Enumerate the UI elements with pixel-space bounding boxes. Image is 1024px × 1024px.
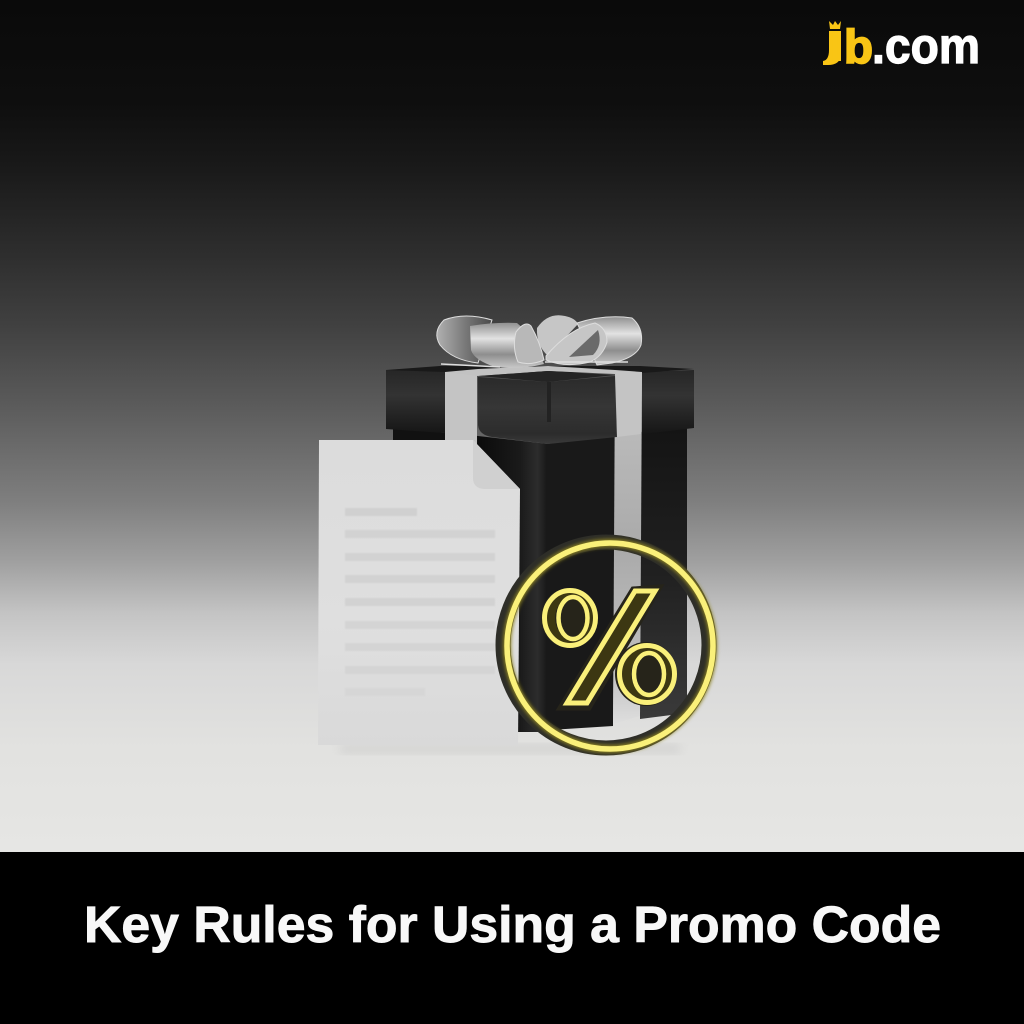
icon: crown — [829, 21, 841, 29]
logo: jb.com — [823, 21, 978, 65]
logo letter j: j — [823, 6, 846, 71]
document corner fold — [473, 440, 520, 489]
box body — [393, 426, 687, 732]
document sheet — [318, 440, 520, 745]
percent lower circle — [615, 642, 677, 706]
percent slash — [560, 587, 660, 708]
floor shadow — [340, 745, 680, 753]
box lid — [386, 366, 694, 444]
badge ring — [503, 542, 713, 749]
illustration: gift box with document and percent badge — [318, 315, 713, 753]
icon: document — [318, 440, 520, 745]
box ribbon: vertical — [445, 372, 642, 724]
logo letter j hook — [823, 50, 841, 65]
logo letter b: b — [844, 20, 873, 73]
logo wordmark: .com — [872, 18, 980, 74]
document text lines — [345, 508, 495, 696]
title: Key Rules for Using a Promo Code — [84, 896, 941, 953]
percent sign — [541, 587, 677, 708]
bow: silver ribbon — [437, 315, 642, 368]
icon: glowing percent badge — [503, 542, 713, 749]
title banner — [0, 852, 1024, 1024]
icon: gift box — [386, 315, 694, 732]
percent upper circle — [541, 588, 597, 648]
